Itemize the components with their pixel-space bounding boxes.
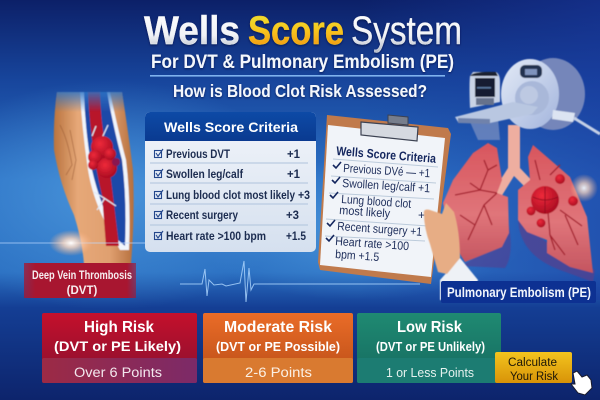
criteria rows: Recent surgery xyxy=(166,210,239,222)
clipboard checklist: + xyxy=(418,208,425,222)
criteria rows: +3 xyxy=(286,210,299,222)
illustration: lungs with pulmonary embolism xyxy=(443,125,595,282)
cuff xyxy=(440,258,478,300)
clipboard checklist: Lung blood clot xyxy=(341,192,412,211)
clipboard checklist: Heart rate >100 xyxy=(335,234,410,253)
risk box: high: Over 6 Points xyxy=(74,365,162,380)
criteria rows: +1.5 xyxy=(286,231,307,243)
risk box: low xyxy=(357,313,501,383)
criteria rows: +1 xyxy=(287,149,301,161)
risk box: moderate xyxy=(203,313,353,383)
label: deep vein thrombosis: (DVT) xyxy=(67,285,97,297)
risk box: low: Low Risk xyxy=(397,319,462,336)
clipboard xyxy=(318,115,451,284)
risk box: high: High Risk xyxy=(84,319,154,336)
risk box: moderate: (DVT or PE Possible) xyxy=(216,339,340,354)
clipboard checklist: Previous DVé — +1 xyxy=(343,161,431,180)
label: deep vein thrombosis xyxy=(24,263,136,298)
lens flare xyxy=(0,230,150,256)
label: deep vein thrombosis: Deep Vein Thrombosis xyxy=(32,270,132,282)
risk box: low: (DVT or PE Unlikely) xyxy=(376,340,485,354)
icon: pointing hand cursor xyxy=(571,371,592,395)
criteria rows: +1 xyxy=(287,169,301,181)
risk box: low: 1 or Less Points xyxy=(386,365,474,380)
subtitle: For DVT & Pulmonary Embolism (PE) xyxy=(151,52,454,73)
criteria rows: +3 xyxy=(298,190,310,202)
risk box: high: (DVT or PE Likely) xyxy=(54,338,181,354)
risk box: high xyxy=(42,313,197,383)
criteria rows: Lung blood clot most likely xyxy=(166,190,296,202)
ECG line xyxy=(180,261,420,302)
illustration: leg with deep vein thrombosis xyxy=(54,92,134,264)
right lung xyxy=(518,145,593,273)
lung shadows xyxy=(462,225,511,268)
illustration: MRI scanner xyxy=(455,58,600,140)
button: calculate your risk: Calculate xyxy=(508,357,557,369)
clipboard checklist: Swollen leg/calf +1 xyxy=(342,176,431,195)
button: calculate your risk xyxy=(495,352,572,383)
title xyxy=(144,9,462,53)
title: System xyxy=(351,9,462,53)
question heading: How is Blood Clot Risk Assessed? xyxy=(173,81,427,101)
panel: wells score criteria card xyxy=(145,112,316,252)
panel header: Wells Score Criteria xyxy=(164,119,298,135)
label: pulmonary embolism xyxy=(441,281,596,303)
risk box: moderate: 2-6 Points xyxy=(245,365,312,380)
clipboard heading: Wells Score Criteria xyxy=(336,144,437,166)
criteria rows: Previous DVT xyxy=(166,149,230,161)
title: Wells xyxy=(144,9,240,53)
criteria rows: Swollen leg/calf xyxy=(166,169,243,181)
clipboard checklist: most likely xyxy=(339,203,391,221)
button: calculate your risk: Your Risk xyxy=(510,371,558,383)
clipboard checklist: bpm +1.5 xyxy=(335,247,380,264)
clipboard checklist xyxy=(335,161,431,264)
left lung xyxy=(443,143,509,262)
clipboard clip xyxy=(361,115,418,141)
criteria rows xyxy=(154,149,310,243)
trachea xyxy=(494,125,537,197)
clipboard checklist: Recent surgery +1 xyxy=(337,219,423,239)
title: Score xyxy=(248,9,344,53)
illustration: patient monitor xyxy=(470,72,500,108)
criteria rows: Heart rate >100 bpm xyxy=(166,231,266,243)
lung lens flare xyxy=(570,174,598,202)
panel header xyxy=(145,112,316,141)
risk box: moderate: Moderate Risk xyxy=(224,319,332,336)
hand holding clipboard xyxy=(424,203,478,300)
